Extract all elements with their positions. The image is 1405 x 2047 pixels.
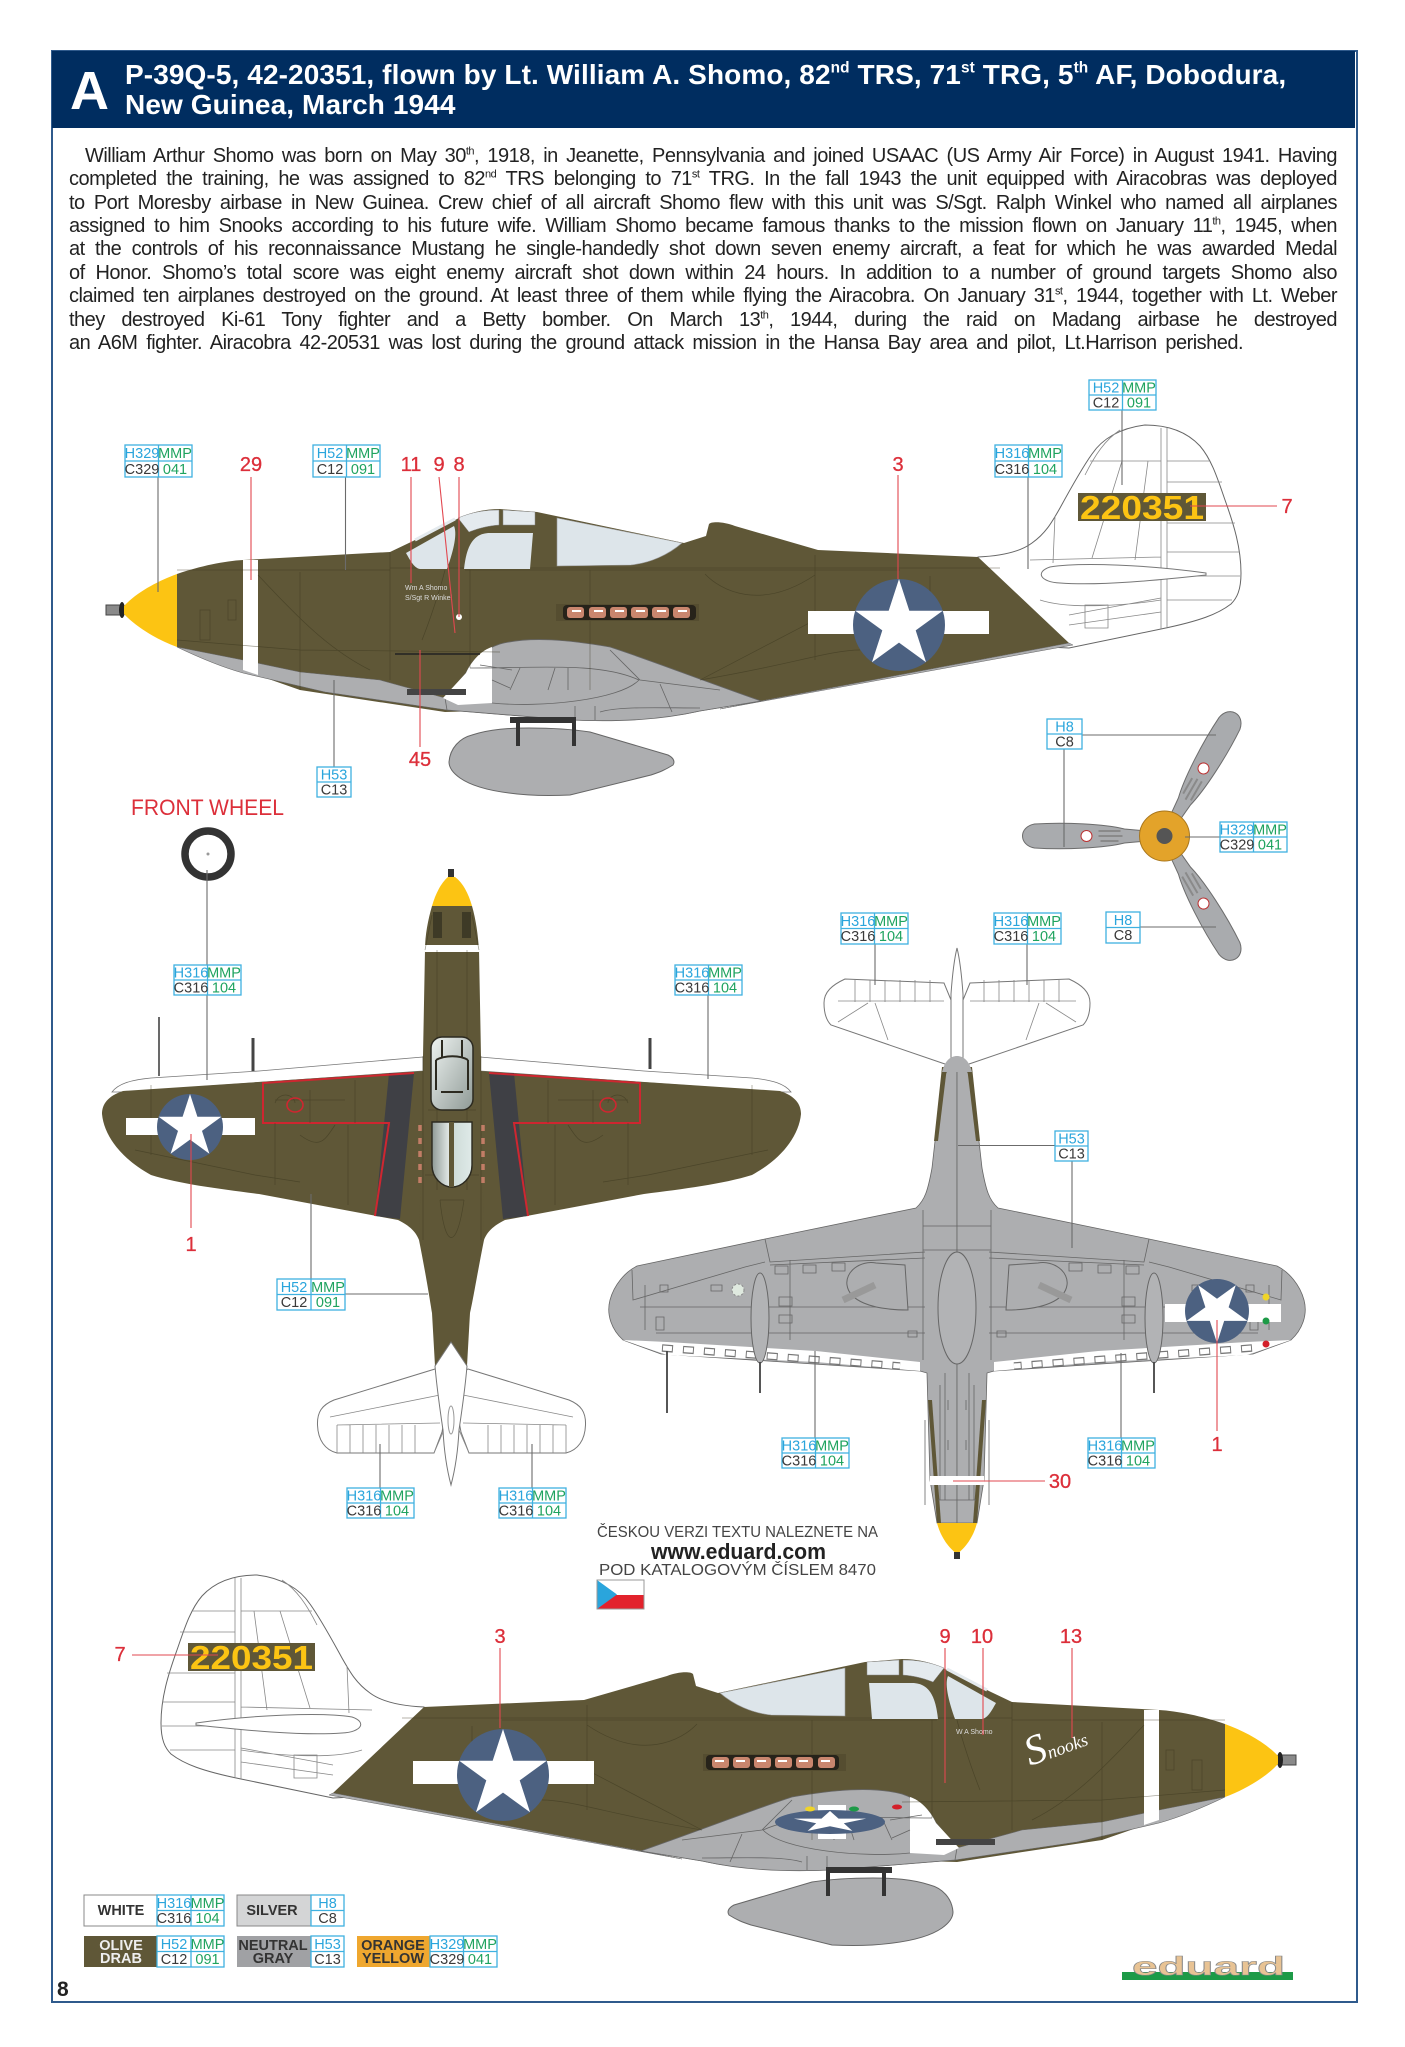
propeller stub: [106, 605, 120, 615]
callout silver prop lower: C8: [1114, 928, 1132, 944]
callout fin: [1089, 380, 1156, 412]
gun port ring: [287, 1098, 303, 1112]
callout leading edge left: MMP: [815, 1438, 849, 1454]
blade 2: [1162, 707, 1247, 827]
callout leading edge left: H316: [782, 1438, 816, 1454]
Snooks nose art: Snooks: [1018, 1711, 1093, 1775]
underside antennas: [667, 1351, 1154, 1413]
callout fin: 091: [1127, 396, 1151, 412]
callout tail left: MMP: [874, 914, 908, 930]
callout underside: C13: [1058, 1146, 1085, 1162]
callout tail right: 104: [1032, 929, 1056, 945]
guns left: [252, 1038, 254, 1071]
callout olive top: [277, 1279, 345, 1311]
callout olive nose: [313, 445, 380, 478]
legend olive drab: DRAB: [100, 1951, 142, 1967]
biography text block: of Honor. Shomo’s total score was eight enemy aircraft shot down within 24 hours. In addition to a number of ground targets Shomo also: [69, 262, 1337, 284]
left wing half: [102, 1057, 452, 1453]
legend silver: C8: [318, 1911, 337, 1927]
national insignia: [808, 579, 989, 671]
underside panel lines: [632, 1210, 957, 1505]
drop tank: [449, 728, 674, 796]
nose yellow: [432, 877, 472, 906]
callout spinner: 041: [163, 462, 187, 478]
biography text block: they destroyed Ki-61 Tony fighter and a Betty bomber. On March 13th, 1944, during the raid on Madang airbase he destroyed: [69, 309, 1337, 331]
white wing root patch: [443, 647, 492, 705]
callout stabiliser left: 104: [385, 1504, 409, 1520]
number 10: 10: [971, 1626, 993, 1648]
top view aircraft: [102, 869, 801, 1485]
callout olive nose: 091: [351, 462, 375, 478]
callout fin: MMP: [1122, 380, 1156, 396]
callout neutral gray: [317, 767, 351, 798]
wing gun pod: [751, 1273, 769, 1363]
recognition light: [732, 1284, 744, 1296]
red no-step outline: [263, 1073, 414, 1216]
eduard logo: eduard: [1132, 1951, 1285, 1981]
callout olive nose: H52: [317, 446, 343, 462]
callout stabiliser left: [347, 1488, 414, 1520]
legend neutral gray: [237, 1936, 344, 1968]
wing olive: [102, 1071, 452, 1250]
callout stabiliser left: H316: [347, 1488, 381, 1504]
paint callouts: [125, 380, 1287, 1520]
windscreen side strip: [415, 519, 455, 540]
callout leading edge right: H316: [1088, 1438, 1122, 1454]
callout prop spinner: C329: [1220, 838, 1254, 854]
serial number: 220351: [1080, 489, 1204, 526]
small hatches: [656, 1263, 917, 1337]
callout stabiliser right: C316: [499, 1504, 533, 1520]
callout stabiliser left: MMP: [380, 1488, 414, 1504]
callout olive top: MMP: [311, 1280, 345, 1296]
callout fin: C12: [1093, 396, 1119, 412]
leading edge white: [623, 1340, 920, 1371]
callout wing right: C316: [675, 980, 709, 996]
wing root: [445, 640, 761, 721]
legend olive drab: [84, 1936, 224, 1968]
note line 2: POD KATALOGOVÝM ČÍSLEM 8470: [599, 1562, 876, 1579]
nose stub: [954, 1552, 960, 1559]
legend silver: H8: [318, 1896, 337, 1912]
olive fuselage edge right: [967, 1067, 980, 1141]
number 7: 7: [1281, 496, 1293, 518]
legend neutral gray: H53: [314, 1937, 341, 1953]
legend orange yellow: C329: [430, 1952, 464, 1968]
callout spinner: MMP: [158, 446, 192, 462]
wing leading edge white: [112, 1057, 423, 1092]
walkway dark strip: [375, 1073, 414, 1219]
callout silver prop lower: [1106, 912, 1140, 944]
crew chief stencil: S/Sgt R Winkel: [405, 595, 453, 602]
callout tail left: C316: [841, 929, 875, 945]
legend orange yellow: [357, 1936, 497, 1968]
wing lights: [805, 1804, 902, 1812]
tailplane: [1041, 565, 1206, 584]
note line 1: ČESKOU VERZI TEXTU NALEZNETE NA: [597, 1524, 879, 1541]
fin underside: [951, 948, 963, 1065]
legend white: H316: [157, 1896, 191, 1912]
Czech version note: [597, 1524, 879, 1579]
serial number: 220351: [190, 1639, 313, 1676]
underside view aircraft: [609, 948, 1305, 1559]
biography text block: claimed ten airplanes destroyed on the ground. At least three of them while flying the Airacobra. On January 31st, 1944, together with Lt. Weber: [69, 285, 1337, 307]
leader lines paint: [158, 410, 1220, 1488]
callout underside: H53: [1058, 1132, 1085, 1148]
tail cone tip: [942, 1056, 972, 1072]
leader lines markings: [132, 475, 1277, 1783]
callout spinner: C329: [125, 462, 159, 478]
legend white: [84, 1895, 224, 1927]
legend silver: SILVER: [246, 1903, 298, 1919]
legend white: MMP: [191, 1896, 224, 1912]
number 30: 30: [1049, 1471, 1071, 1493]
propeller view: [1022, 707, 1247, 965]
wing panel lines: [135, 1080, 355, 1205]
callout leading edge right: C316: [1088, 1454, 1122, 1470]
biography text block: [69, 145, 1338, 354]
leading edge panel centres: [663, 1348, 900, 1366]
marking 8 dot: [456, 614, 462, 620]
underside insignia: [1165, 1279, 1281, 1343]
callout stabiliser left: C316: [347, 1504, 381, 1520]
flap hinge: [843, 1285, 875, 1300]
callout olive top: C12: [281, 1295, 307, 1311]
Czech flag: [597, 1580, 644, 1609]
windscreen: [406, 526, 455, 569]
number 1 underside: 1: [1211, 1434, 1223, 1456]
scheme letter: A: [70, 61, 109, 121]
tank pylon: [510, 717, 576, 746]
callout wing right: MMP: [708, 966, 742, 982]
spinner hub: [1140, 811, 1190, 861]
wing insignia: [126, 1094, 255, 1160]
nose white stripe: [425, 945, 479, 952]
callout leading edge left: 104: [820, 1454, 844, 1470]
blade 3: [1162, 845, 1247, 965]
callout wing left: 104: [212, 980, 236, 996]
callout leading edge right: 104: [1126, 1454, 1150, 1470]
elevator lines: [330, 1395, 444, 1453]
callout stabiliser right: H316: [499, 1488, 533, 1504]
olive nose edge right: [973, 1400, 986, 1523]
front wheel title: FRONT WHEEL: [131, 795, 284, 820]
callout tail right: MMP: [1027, 914, 1061, 930]
identification stripe: [243, 560, 258, 675]
website: www.eduard.com: [650, 1539, 826, 1564]
legend silver: [237, 1895, 344, 1927]
leading edge panels: [662, 1348, 900, 1366]
callout silver prop upper: C8: [1055, 734, 1074, 750]
callout underside: [1055, 1131, 1088, 1162]
callout silver prop upper: [1047, 719, 1082, 750]
callout spinner: H329: [125, 446, 159, 462]
nose yellow: [937, 1523, 977, 1554]
callout prop spinner: MMP: [1253, 822, 1287, 838]
exhausts plan: [420, 1125, 483, 1190]
callout wing right: 104: [713, 980, 737, 996]
legend orange yellow: MMP: [463, 1937, 497, 1953]
underside right half mirrored: [957, 979, 1305, 1523]
nose bays: [433, 912, 471, 938]
legend white: WHITE: [98, 1903, 145, 1919]
antennas: [158, 1017, 160, 1076]
front wheel: [185, 831, 231, 877]
callout wing left: H316: [174, 966, 208, 982]
biography text block: completed the training, he was assigned to 82nd TRS belonging to 71st TRG. In the fall 1943 the unit equipped with Airacobras was deployed: [69, 168, 1337, 190]
number 3 lower: 3: [494, 1626, 506, 1648]
exhaust stacks: [556, 604, 699, 621]
callout olive nose: C12: [317, 462, 343, 478]
colour legend: [84, 1895, 497, 1968]
legend olive drab: OLIVE: [99, 1938, 143, 1954]
right side serial and nose art: [188, 1639, 1093, 1839]
nose white stripe: [930, 1476, 984, 1485]
pilot name stencil: W A Shomo: [956, 1729, 993, 1736]
callout stabiliser right: 104: [537, 1504, 561, 1520]
centre drop tank: [938, 1252, 976, 1364]
identification lights: [1262, 1294, 1270, 1348]
legend orange yellow: 041: [468, 1952, 492, 1968]
stabiliser underside: [824, 979, 957, 1068]
number 8: 8: [453, 454, 465, 476]
callout fin: H52: [1093, 380, 1119, 396]
callout white rear fuselage: C316: [995, 462, 1029, 478]
blade 1: [1022, 823, 1146, 849]
cannon barrels: [407, 689, 466, 695]
number 45: 45: [409, 749, 431, 771]
callout white rear fuselage: H316: [995, 446, 1029, 462]
callout prop spinner: 041: [1258, 838, 1282, 854]
legend white: C316: [157, 1911, 191, 1927]
callout neutral gray: C13: [321, 782, 347, 798]
nose stub: [448, 869, 454, 877]
left side stencils and serial: [395, 489, 1206, 654]
legend olive drab: MMP: [191, 1937, 224, 1953]
biography text block: at the controls of his reconnaissance Mustang he single-handedly shot down seven enemy aircraft, a feat for which he was awarded Medal: [69, 238, 1337, 260]
spinner: [124, 574, 177, 647]
fuselage lines: [423, 915, 481, 1240]
callout wing left: MMP: [207, 966, 241, 982]
legend white: 104: [195, 1911, 220, 1927]
right side view of aircraft (mirrored airframe): [161, 1575, 1296, 1946]
marking numbers: [114, 454, 1293, 1666]
olive nose edge left: [928, 1400, 941, 1523]
underside half: [609, 979, 957, 1523]
callout tail left: [841, 913, 908, 945]
serial number panel: [188, 1643, 315, 1671]
aircraft title line 2: New Guinea, March 1944: [125, 89, 456, 120]
legend olive drab: H52: [161, 1937, 187, 1953]
callout wing left: [174, 965, 241, 996]
underwing insignia seen from side: [775, 1805, 885, 1839]
callout olive top: 091: [316, 1295, 340, 1311]
fin centre detail: [448, 1406, 454, 1434]
legend olive drab: C12: [161, 1952, 187, 1968]
number 9: 9: [433, 454, 445, 476]
callout prop spinner: [1220, 822, 1287, 854]
callout white rear fuselage: 104: [1033, 462, 1057, 478]
left side view of aircraft: [106, 425, 1241, 796]
callout stabiliser right: MMP: [532, 1488, 566, 1504]
canopy: [431, 1037, 473, 1110]
callout olive nose: MMP: [346, 446, 380, 462]
wing underside grey: [609, 1056, 957, 1523]
callout olive top: H52: [281, 1280, 307, 1296]
biography text block: assigned to him Snooks according to his future wife. William Shomo became famous thanks to the mission flown on January 11th, 1945, when: [69, 215, 1337, 237]
legend orange yellow: H329: [430, 1937, 464, 1953]
callout wing left: C316: [174, 980, 208, 996]
legend olive drab: 091: [195, 1952, 220, 1968]
upper canopy panes: [458, 510, 535, 532]
elevator lines: [838, 980, 944, 1040]
title banner: [52, 51, 1355, 128]
callout silver prop lower: H8: [1114, 913, 1132, 929]
legend neutral gray: NEUTRAL: [238, 1938, 308, 1954]
fuselage panel lines: [177, 552, 1000, 690]
callout wing right: H316: [675, 966, 709, 982]
rudder and rear fuselage: [900, 425, 1241, 648]
callout tail left: H316: [841, 914, 875, 930]
propeller stub base: [119, 602, 125, 618]
rear glass divider: [449, 1122, 454, 1187]
callout leading edge right: [1088, 1438, 1155, 1470]
canopy frame: [436, 1040, 468, 1092]
callout silver prop upper: H8: [1055, 720, 1074, 736]
callout leading edge left: [782, 1438, 849, 1470]
number 3: 3: [892, 454, 904, 476]
callout white rear fuselage: [995, 445, 1062, 478]
number 13: 13: [1060, 1626, 1082, 1648]
rear canopy glass: [557, 518, 682, 566]
callout wing right: [675, 965, 742, 996]
callout tail left: 104: [879, 929, 903, 945]
number 29: 29: [240, 454, 262, 476]
number 9 lower: 9: [939, 1626, 951, 1648]
door window: [464, 533, 533, 569]
legend neutral gray: C13: [314, 1952, 341, 1968]
number 7 lower: 7: [114, 1644, 126, 1666]
serial number panel: [1078, 493, 1206, 521]
legend orange yellow: ORANGE: [361, 1938, 425, 1954]
biography text block: William Arthur Shomo was born on May 30th, 1918, in Jeanette, Pennsylvania and joined USAAC (US Army Air Force) in August 1941. Having: [85, 145, 1337, 167]
lower fuselage grey: [177, 647, 761, 721]
guns right: [648, 1038, 652, 1069]
callout leading edge right: MMP: [1121, 1438, 1155, 1454]
callout neutral gray: H53: [321, 768, 347, 784]
biography text block: to Port Moresby airbase in New Guinea. Crew chief of all aircraft Shomo flew with this unit was S/Sgt. Ralph Winkel who named all airplanes: [69, 192, 1337, 214]
fin plan: [435, 1342, 467, 1485]
number 11: 11: [401, 454, 421, 476]
stabiliser: [317, 1369, 452, 1453]
biography text block: an A6M fighter. Airacobra 42-20531 was lost during the ground attack mission in the Hansa Bay area and pilot, Lt.Harrison perished.: [69, 332, 1243, 354]
aircraft title line 1: P-39Q-5, 42-20351, flown by Lt. William A. Shomo, 82nd TRS, 71st TRG, 5th AF, Dobodura,: [125, 59, 1286, 90]
gear door bulge: [847, 1263, 908, 1310]
fuselage plan: [419, 906, 484, 1366]
olive fuselage edge left: [934, 1067, 947, 1141]
gun port: [395, 653, 480, 655]
eduard logo: [1122, 1951, 1293, 1981]
callout prop spinner: H329: [1220, 822, 1254, 838]
callout tail right: H316: [994, 914, 1028, 930]
callout tail right: C316: [994, 929, 1028, 945]
legend neutral gray: GRAY: [253, 1951, 294, 1967]
callout white rear fuselage: MMP: [1028, 446, 1062, 462]
rear glass: [432, 1122, 472, 1187]
right wing half mirrored: [451, 1057, 801, 1453]
callout tail right: [994, 913, 1061, 945]
number 1: 1: [185, 1234, 197, 1256]
callout stabiliser right: [499, 1488, 566, 1520]
wing panel lines: [470, 650, 720, 720]
fuselage nose lines: [938, 1373, 976, 1500]
callout leading edge left: C316: [782, 1454, 816, 1470]
callout spinner: [125, 445, 192, 478]
legend orange yellow: YELLOW: [362, 1951, 424, 1967]
page number: 8: [57, 1978, 69, 2001]
rear belly grey strip: [720, 643, 1073, 709]
spinner centre: [1156, 828, 1172, 844]
rudder panel lines: [1030, 428, 1240, 629]
olive fuselage: [177, 509, 1069, 712]
pilot name stencils: Wm A Shomo: [405, 585, 448, 592]
